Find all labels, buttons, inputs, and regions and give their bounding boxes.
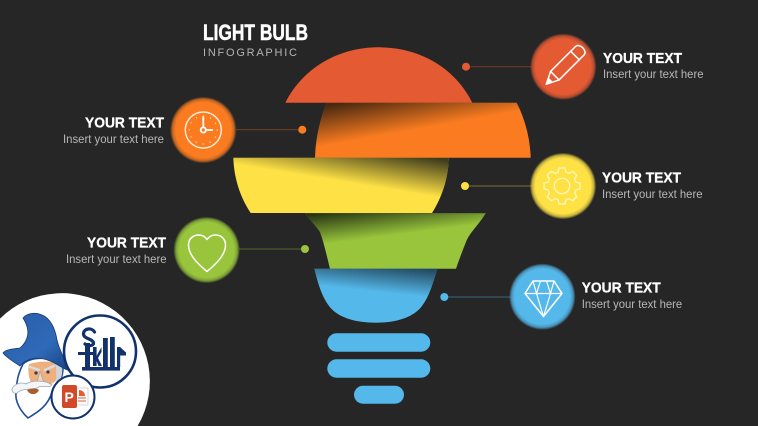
icon: gear (544, 168, 580, 204)
bulb band: blue (314, 269, 437, 323)
powerpoint logo circle: P (64, 389, 74, 405)
wizard nose (36, 371, 44, 386)
callout: diamond (509, 264, 683, 330)
callout: gear: YOUR TEXT (602, 171, 681, 187)
wizard eyes and brows (30, 366, 54, 370)
wizard mouth (27, 388, 39, 394)
callout: pencil: YOUR TEXT (603, 51, 682, 67)
callout: heart: YOUR TEXT (87, 236, 166, 252)
callout: heart (66, 217, 240, 283)
connector: orange (236, 126, 306, 134)
callout: clock: Insert your text here (63, 132, 164, 146)
bulb band: green (305, 213, 486, 269)
wizard hat (3, 313, 71, 371)
callout: gear (530, 153, 703, 219)
wizard hair (55, 362, 62, 387)
callout: gear: Insert your text here (602, 187, 703, 201)
light bulb (233, 47, 531, 404)
bulb band: red (285, 47, 472, 103)
callout: clock (63, 97, 236, 163)
wizard head and beard (16, 358, 63, 418)
callout: diamond: Insert your text here (582, 297, 683, 311)
title (203, 20, 308, 59)
skill logo circle (64, 316, 136, 388)
icon: pencil (542, 44, 587, 88)
icon: diamond (525, 281, 562, 316)
callout: heart: Insert your text here (66, 252, 167, 266)
wizard (3, 313, 71, 418)
callout: clock: YOUR TEXT (85, 116, 164, 132)
wizard face (28, 362, 58, 388)
connector: red (462, 63, 532, 71)
bulb base bars (327, 333, 430, 404)
callout: diamond: YOUR TEXT (582, 281, 661, 297)
callout: pencil (530, 34, 704, 100)
title: INFOGRAPHIC (203, 47, 297, 59)
callout: pencil: Insert your text here (603, 67, 704, 81)
bulb band: yellow (233, 158, 449, 213)
bulb band: orange (315, 103, 531, 158)
powerpoint logo circle (52, 376, 94, 418)
white circle (0, 293, 150, 426)
wizard moustache (12, 381, 52, 393)
icon: clock (185, 112, 221, 148)
logo badge (0, 293, 150, 426)
connector: green (239, 245, 309, 253)
title: LIGHT BULB (203, 20, 308, 45)
connector: yellow (461, 182, 532, 190)
connector: blue (440, 293, 511, 301)
icon: heart (188, 235, 226, 272)
